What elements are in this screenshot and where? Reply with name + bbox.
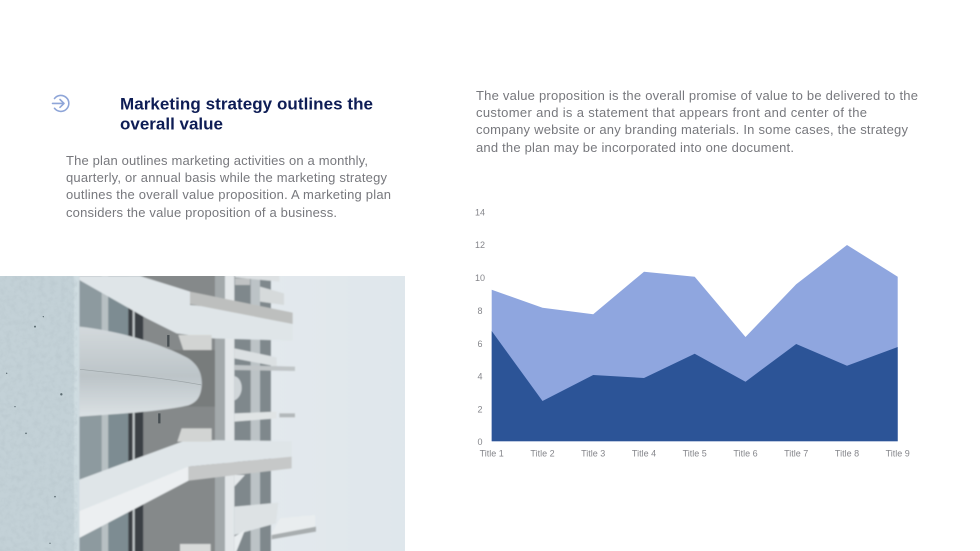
text block: value proposition description (476, 88, 918, 155)
heading: marketing strategy: Marketing strategy outlines the (120, 94, 373, 114)
y axis labels (475, 208, 485, 447)
text block: value proposition description: customer and is a statement that appears front and center of the (476, 105, 867, 120)
y axis labels: 12 (475, 240, 485, 250)
heading: marketing strategy: overall value (120, 114, 223, 134)
x axis labels (480, 448, 910, 458)
text block: marketing plan description (66, 153, 391, 220)
x axis labels: Title 2 (530, 448, 555, 458)
icon: circled arrow (52, 95, 69, 111)
text block: marketing plan description: The plan outlines marketing activities on a monthly, (66, 153, 368, 168)
y axis labels: 2 (477, 404, 483, 414)
text block: value proposition description: The value proposition is the overall promise of value to be delivered to the (476, 88, 918, 103)
x axis labels: Title 4 (632, 448, 656, 458)
y axis labels: 14 (475, 208, 485, 218)
y axis labels: 10 (475, 273, 485, 283)
area series: light blue (492, 245, 898, 441)
text block: marketing plan description: quarterly, or annual basis while the marketing strategy (66, 170, 388, 185)
x axis labels: Title 1 (480, 448, 504, 458)
y axis labels: 6 (477, 339, 483, 349)
text block: marketing plan description: outlines the overall value proposition. A marketing plan (66, 187, 391, 202)
text block: marketing plan description: considers the value proposition of a business. (66, 205, 337, 220)
x axis labels: Title 7 (784, 448, 808, 458)
text block: value proposition description: and the plan may be incorporated into one document. (476, 140, 794, 155)
y axis labels: 4 (477, 372, 483, 382)
x axis labels: Title 6 (733, 448, 758, 458)
area series: dark blue (492, 331, 898, 441)
y axis labels: 8 (477, 306, 483, 316)
area chart (475, 208, 910, 458)
y axis labels: 0 (477, 437, 483, 447)
photo: concrete building facade (0, 267, 417, 551)
heading: marketing strategy (120, 94, 373, 134)
x axis labels: Title 5 (683, 448, 707, 458)
x axis labels: Title 8 (835, 448, 859, 458)
x axis labels: Title 9 (886, 448, 910, 458)
text block: value proposition description: company website or any branding materials. In some cases, the strategy (476, 122, 908, 137)
x axis labels: Title 3 (581, 448, 605, 458)
